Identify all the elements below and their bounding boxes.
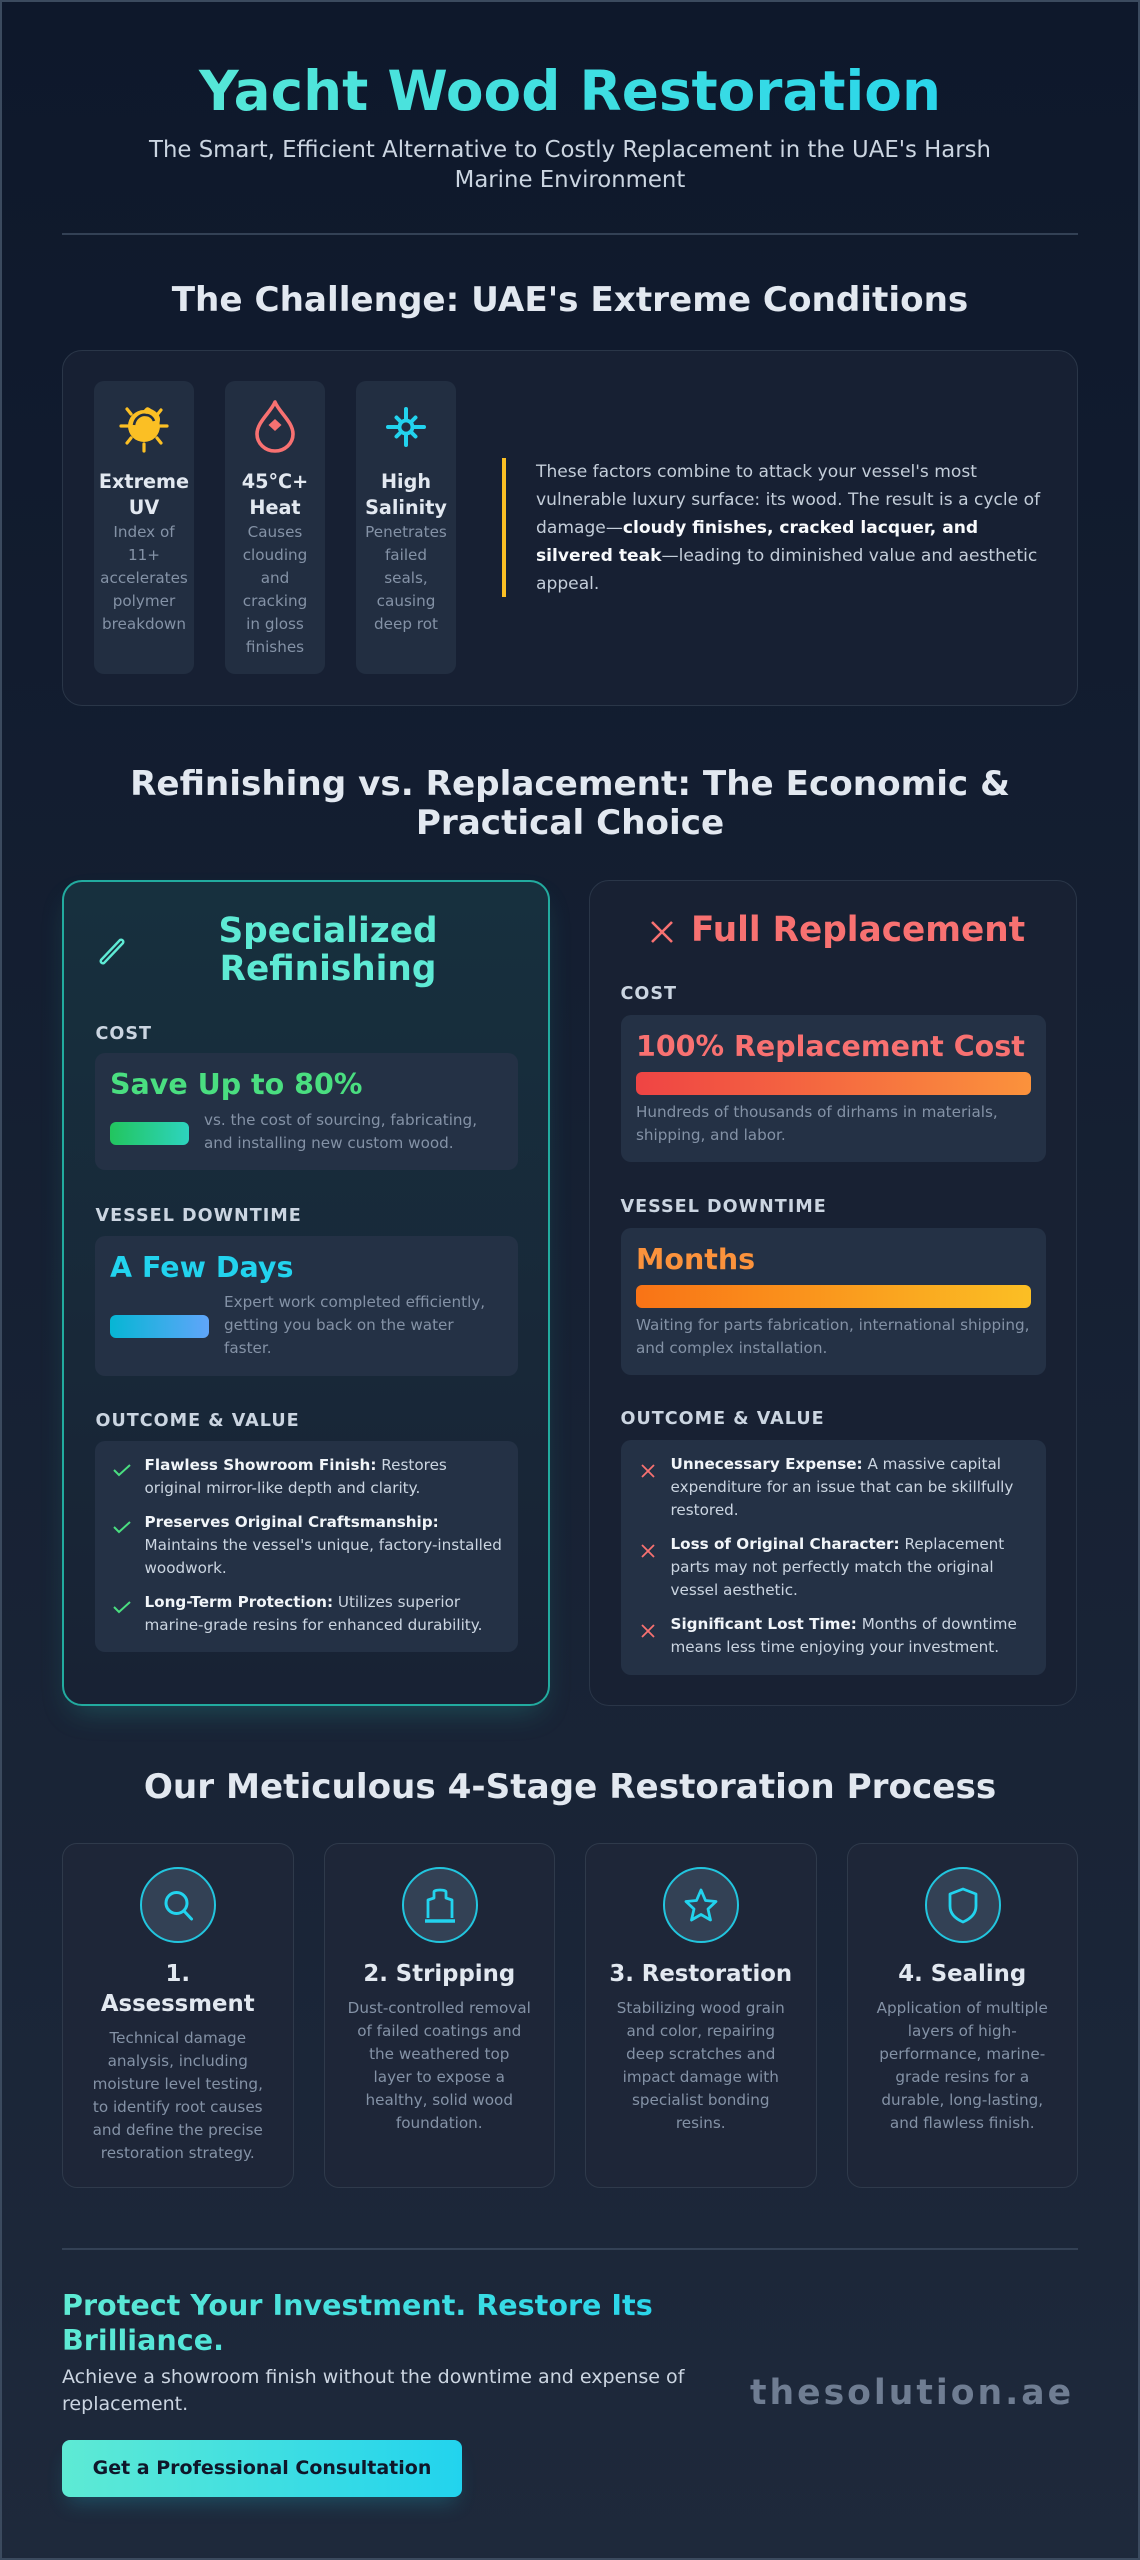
panel title [218,911,438,989]
description: heat: clouding [243,546,307,564]
heading: comparison: Practical Choice [416,803,724,843]
icon: star [663,1867,739,1943]
card: heat [225,381,325,674]
description: salinity: deep rot [374,615,438,633]
note: downtime: Expert work completed efficiently, [224,1293,485,1311]
label: heat: 45°C+ [242,470,308,493]
text: Significant Lost Time: Months of downtime [670,1615,1017,1633]
label: cost: COST [96,1024,152,1044]
step text: impact damage with [623,2068,779,2086]
value: save up to 80%: Save Up to 80% [110,1068,362,1101]
step text: of failed coatings and [357,2022,521,2040]
step 2: stripping [324,1843,555,2188]
icon: cross [641,1624,655,1638]
step text: Technical damage [109,2029,246,2047]
text [144,1513,502,1577]
subtitle: Marine Environment [455,167,685,193]
step text [93,2029,263,2162]
text: Loss of Original Character: Replacement [670,1535,1004,1553]
step text: moisture level testing, [93,2075,263,2093]
panel title: Full Replacement [691,910,1025,950]
text: Long-Term Protection: Utilizes superior [144,1593,460,1611]
step title [101,1961,255,2017]
label: outcome: OUTCOME & VALUE [96,1411,300,1431]
text: Flawless Showroom Finish: Restores [144,1456,447,1474]
description: heat: cracking [243,592,307,610]
description: heat: finishes [246,638,304,656]
note: downtime: Waiting for parts fabrication, international shipping, [636,1316,1029,1334]
CTA button: Get a Professional Consultation [93,2457,431,2479]
CTA heading [62,2288,742,2357]
callout: damage explanation: silvered teak—leading to diminished value and aesthetic [536,546,1037,566]
text [144,1593,482,1634]
icon: brush [100,938,124,964]
callout: damage explanation [502,458,1062,597]
description: UV: 11+ [128,546,160,564]
panel: challenge [62,350,1078,706]
step title: 4. Sealing [898,1961,1026,1987]
note: cost [636,1103,998,1144]
icon: cross [641,1544,655,1558]
bar: downtime [110,1315,209,1338]
step text: the weathered top [369,2045,509,2063]
subtitle: The Smart, Efficient Alternative to Costly Replacement in the UAE's Harsh [149,137,991,163]
note: downtime: faster. [224,1339,272,1357]
label: extreme UV: UV [129,496,159,519]
text: Preserves Original Craftsmanship: [144,1513,439,1531]
label: extreme UV [99,470,189,519]
text: restored. [670,1501,739,1519]
drawback: expense [641,1455,1013,1519]
CTA text: Achieve a showroom finish without the downtime and expense of [62,2366,684,2388]
label: outcome: OUTCOME & VALUE [620,1409,825,1429]
callout: damage explanation: appeal. [536,574,599,594]
label: downtime: VESSEL DOWNTIME [96,1206,302,1226]
value: a few days: A Few Days [110,1250,293,1284]
step text: and define the precise [93,2121,263,2139]
step text: restoration strategy. [101,2144,255,2162]
CTA text [62,2364,684,2418]
step text: healthy, solid wood [366,2091,513,2109]
step 3: restoration [585,1843,816,2188]
description: UV: polymer [113,592,175,610]
step text: to identify root causes [93,2098,263,2116]
description: salinity: Penetrates [365,523,447,541]
icon: flame drop [255,400,295,453]
label: salinity: High [381,470,431,493]
description: UV [100,523,188,633]
metric: downtime [95,1236,518,1376]
note: downtime [636,1316,1029,1357]
metric: cost [621,1015,1046,1162]
label: extreme UV: Extreme [99,470,189,493]
panel: specialized refinishing [62,880,550,1706]
step text: resins. [676,2114,726,2132]
icon: shield [924,1867,1000,1943]
card: extreme UV [94,381,194,674]
callout: damage explanation: These factors combine to attack your vessel's most [536,462,977,482]
title: Yacht Wood Restoration [199,58,941,122]
benefit: craftsmanship [113,1513,502,1577]
value: 100%: 100% Replacement Cost [636,1030,1025,1062]
step text: Application of multiple [877,1999,1048,2017]
metric: downtime [621,1228,1046,1375]
step text: foundation. [396,2114,483,2132]
step text: deep scratches and [626,2045,775,2063]
benefit: flawless finish [113,1456,447,1497]
note: downtime [224,1293,485,1357]
step text: Dust-controlled removal [348,1999,531,2017]
label: salinity: Salinity [365,496,447,519]
text: means less time enjoying your investment. [670,1638,999,1656]
step text [586,1997,816,2134]
panel: full replacement [589,880,1077,1706]
CTA button [62,2440,462,2497]
card: salinity [356,381,456,674]
panel title: Refinishing [220,949,436,989]
value: months: Months [636,1242,755,1276]
icon: check [113,1464,131,1476]
text: vessel aesthetic. [670,1581,798,1599]
step text: and color, repairing [626,2022,775,2040]
step text: layer to expose a [374,2068,505,2086]
text [670,1615,1017,1656]
subtitle [148,137,991,193]
text [670,1535,1004,1599]
step text [848,1997,1077,2134]
step text: Stabilizing wood grain [617,1999,785,2017]
icon: cross [651,921,673,943]
note: cost: and installing new custom wood. [204,1134,454,1152]
label: heat [242,470,308,519]
text [670,1455,1013,1519]
description: salinity: seals, [384,569,428,587]
bar: cost [110,1122,189,1145]
icon: magnifier [140,1867,216,1943]
description: UV: Index of [113,523,175,541]
step title: 3. Restoration [609,1961,792,1987]
text: parts may not perfectly match the original [670,1558,994,1576]
description: UV: accelerates [100,569,188,587]
heading: comparison: Refinishing vs. Replacement: The Economic & [130,764,1010,804]
description: salinity [365,523,447,633]
callout: damage explanation: vulnerable luxury surface: its wood. The result is a cycle of [536,490,1040,510]
benefit: protection [113,1593,482,1634]
text [144,1456,447,1497]
step 4: sealing [846,1843,1078,2188]
bar: cost [636,1072,1031,1095]
label: downtime: VESSEL DOWNTIME [620,1197,827,1217]
step text: and flawless finish. [890,2114,1035,2132]
text: expenditure for an issue that can be skillfully [670,1478,1013,1496]
metric: cost [95,1053,518,1170]
step text: layers of high- [908,2022,1017,2040]
description: heat: in gloss [246,615,304,633]
note: downtime: and complex installation. [636,1339,827,1357]
step text: durable, long-lasting, [881,2091,1043,2109]
text: Unnecessary Expense: A massive capital [670,1455,1001,1473]
description: heat [243,523,307,656]
step text: performance, marine- [879,2045,1045,2063]
description: salinity: causing [377,592,435,610]
list: drawbacks [621,1440,1046,1675]
note: cost: vs. the cost of sourcing, fabricating, [204,1111,477,1129]
step 1: assessment [62,1843,294,2188]
step text [324,1997,554,2134]
step title: 1. [165,1961,190,1987]
title [62,54,1078,126]
description: salinity: failed [385,546,427,564]
list: benefits [95,1441,518,1652]
label: cost: COST [620,984,677,1004]
heading: comparison [130,764,1010,843]
icon: sun [119,407,169,453]
note: downtime: getting you back on the water [224,1316,454,1334]
icon: cross [641,1464,655,1478]
description: heat: Causes [248,523,302,541]
CTA heading: Protect Your Investment. Restore Its [62,2288,653,2322]
icon: check [113,1521,131,1534]
text: original mirror-like depth and clarity. [144,1479,420,1497]
text: Maintains the vessel's unique, factory-installed [144,1536,502,1554]
bar: downtime [636,1285,1031,1308]
icon: scraper [402,1867,478,1943]
drawback: lost time [641,1615,1017,1656]
text: woodwork. [144,1559,227,1577]
step text: analysis, including [108,2052,248,2070]
step text: specialist bonding [632,2091,770,2109]
note: cost: Hundreds of thousands of dirhams in materials, [636,1103,998,1121]
step title: Assessment [101,1991,255,2017]
step text: grade resins for a [895,2068,1029,2086]
heading: the challenge: The Challenge: UAE's Extreme Conditions [172,280,968,320]
note: cost: shipping, and labor. [636,1126,786,1144]
brand logo text: thesolution.ae [750,2373,1074,2413]
panel title: Specialized [218,911,438,951]
CTA heading: Brilliance. [62,2323,224,2357]
label: salinity [365,470,447,519]
note: cost [204,1111,477,1152]
icon: salt crystal [386,407,426,447]
label: heat: Heat [249,496,301,519]
text: marine-grade resins for enhanced durability. [144,1616,482,1634]
step title: 2. Stripping [363,1961,515,1987]
callout: damage explanation: damage—cloudy finishes, cracked lacquer, and [536,518,978,538]
description: UV: breakdown [102,615,186,633]
description: heat: and [261,569,289,587]
CTA text: replacement. [62,2393,188,2415]
drawback: character [641,1535,1004,1599]
heading: process: Our Meticulous 4-Stage Restoration Process [144,1767,996,1807]
icon: check [113,1601,131,1614]
